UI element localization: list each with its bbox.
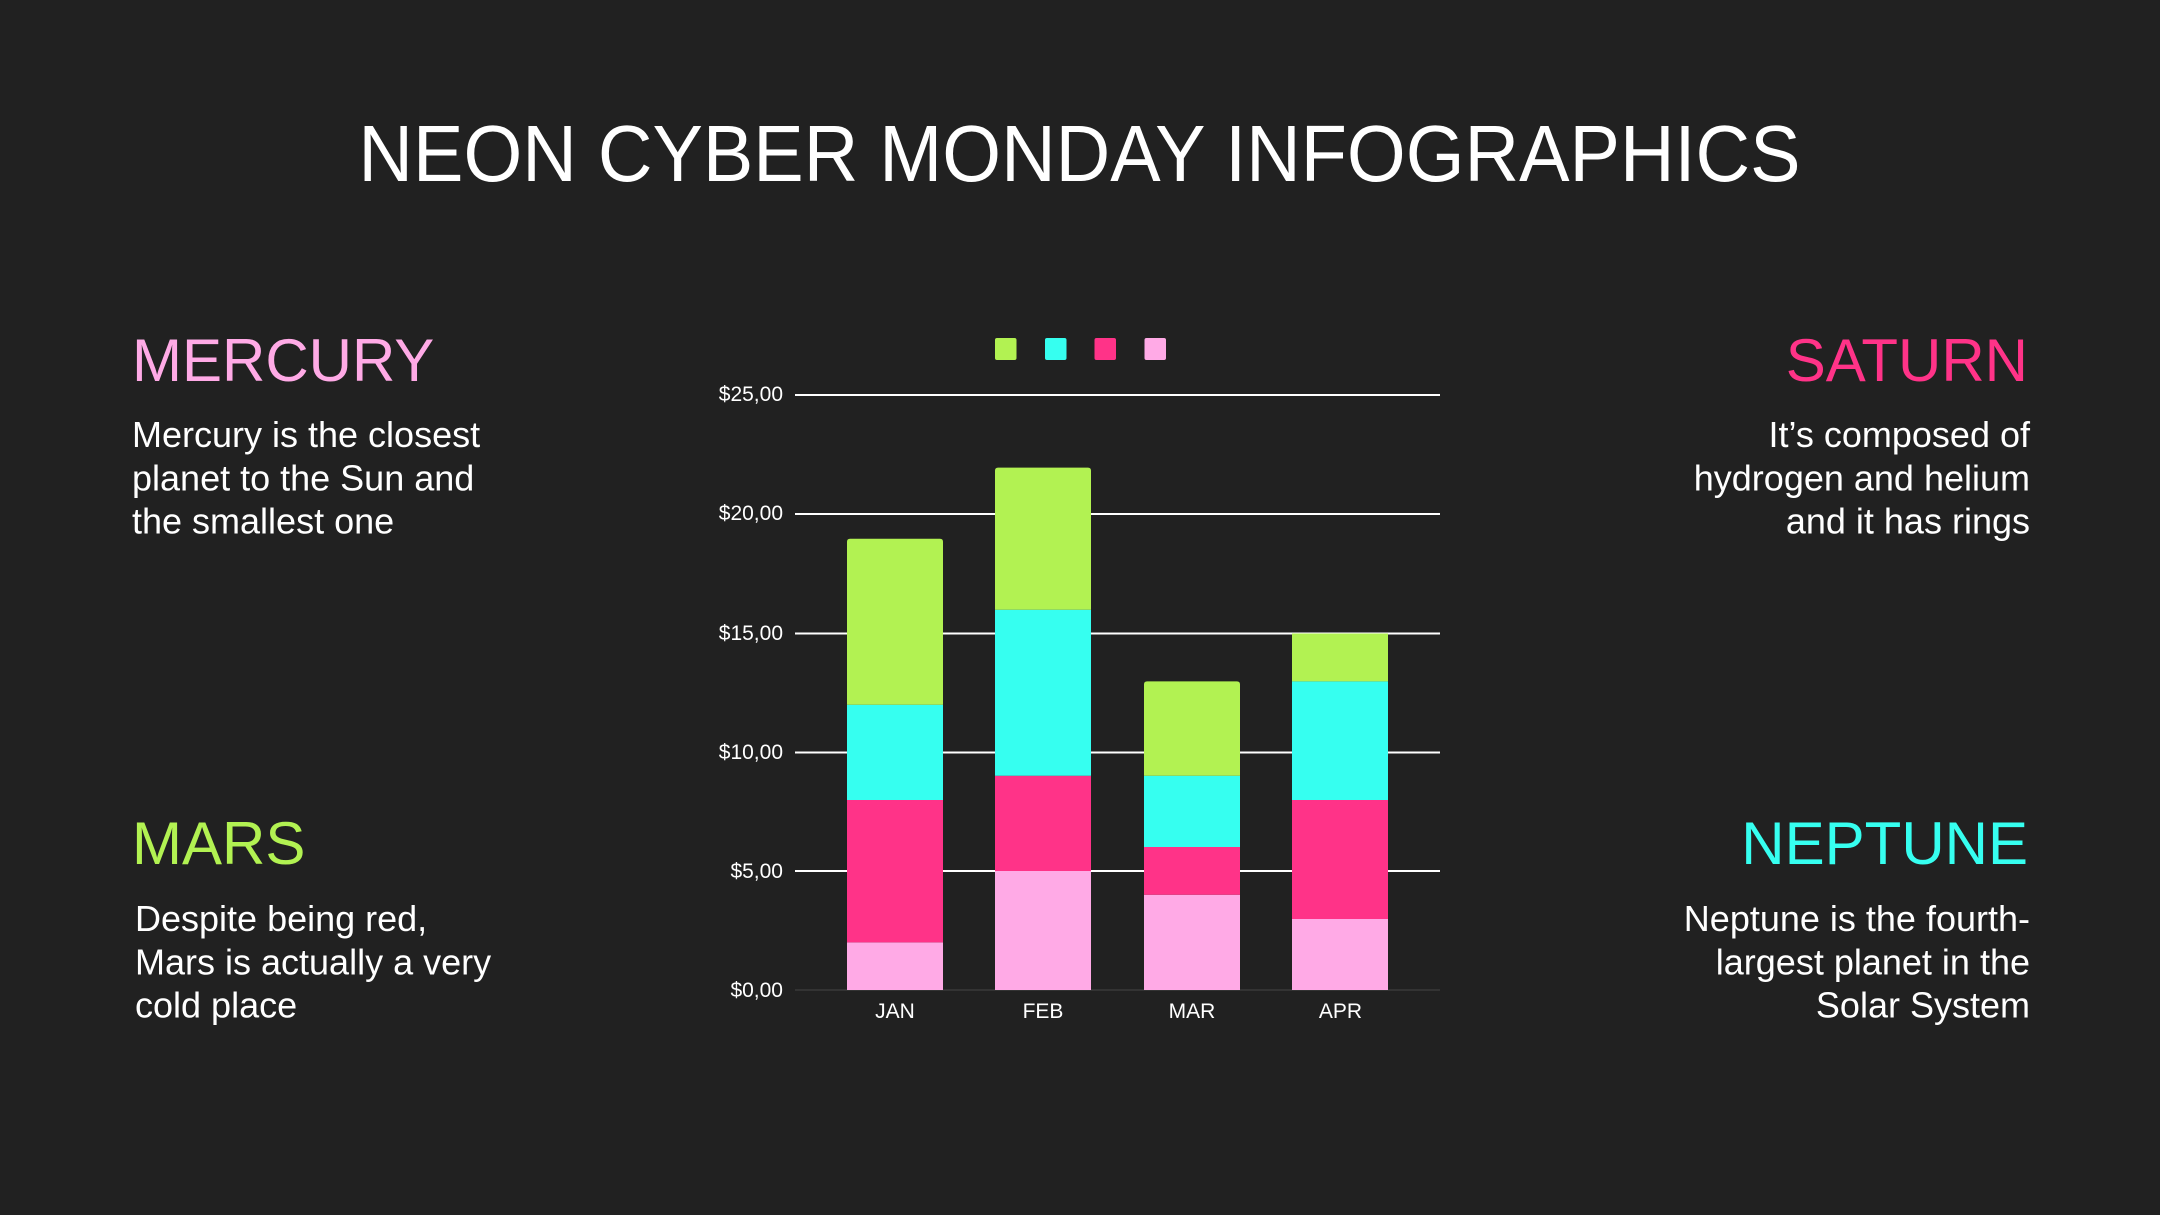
- heading: saturn: SATURN: [1786, 327, 2028, 394]
- panel: mercury: [132, 327, 480, 542]
- text block: mercury: the smallest one: [132, 500, 394, 542]
- x axis labels: [875, 1000, 1362, 1023]
- heading: mercury: MERCURY: [132, 327, 434, 394]
- y axis labels: $5,00: [730, 860, 783, 883]
- heading: neptune: NEPTUNE: [1741, 810, 2028, 877]
- heading: mars: MARS: [132, 810, 305, 877]
- y axis labels: $25,00: [719, 383, 783, 406]
- text block: mars: Despite being red,: [135, 898, 427, 939]
- x axis labels: JAN: [875, 1000, 915, 1023]
- text block: mercury: Mercury is the closest: [132, 414, 480, 455]
- text block: mars: cold place: [135, 984, 297, 1026]
- panel: saturn: [1694, 327, 2031, 542]
- text block: neptune: largest planet in the: [1716, 942, 2030, 982]
- title: NEON CYBER MONDAY INFOGRAPHICS: [358, 110, 1801, 198]
- x axis labels: APR: [1319, 1000, 1362, 1023]
- bar: JAN: [847, 539, 943, 990]
- x axis labels: FEB: [1023, 1000, 1063, 1023]
- y axis labels: $0,00: [730, 979, 783, 1002]
- bar: MAR: [1144, 681, 1240, 990]
- text block: neptune: [1684, 898, 2030, 1026]
- text block: mars: [135, 898, 491, 1026]
- y axis labels: $15,00: [719, 622, 783, 645]
- chart legend: [995, 338, 1166, 360]
- text block: saturn: [1694, 414, 2031, 542]
- panel: mars: [132, 810, 491, 1026]
- text block: mars: Mars is actually a very: [135, 942, 491, 982]
- y axis labels: [719, 383, 783, 1002]
- bar: FEB: [995, 468, 1091, 990]
- text block: mercury: [132, 414, 480, 542]
- bar: APR: [1292, 634, 1388, 990]
- text block: neptune: Neptune is the fourth-: [1684, 898, 2030, 939]
- text block: saturn: and it has rings: [1786, 500, 2030, 542]
- panel: neptune: [1684, 810, 2030, 1026]
- text block: mercury: planet to the Sun and: [132, 458, 474, 498]
- x axis labels: MAR: [1169, 1000, 1215, 1023]
- stacked bar chart: [719, 338, 1440, 1023]
- text block: saturn: hydrogen and helium: [1694, 458, 2030, 498]
- y axis labels: $20,00: [719, 502, 783, 525]
- text block: neptune: Solar System: [1816, 984, 2030, 1026]
- grid lines: [795, 395, 1440, 990]
- text block: saturn: It’s composed of: [1769, 414, 2031, 455]
- y axis labels: $10,00: [719, 741, 783, 764]
